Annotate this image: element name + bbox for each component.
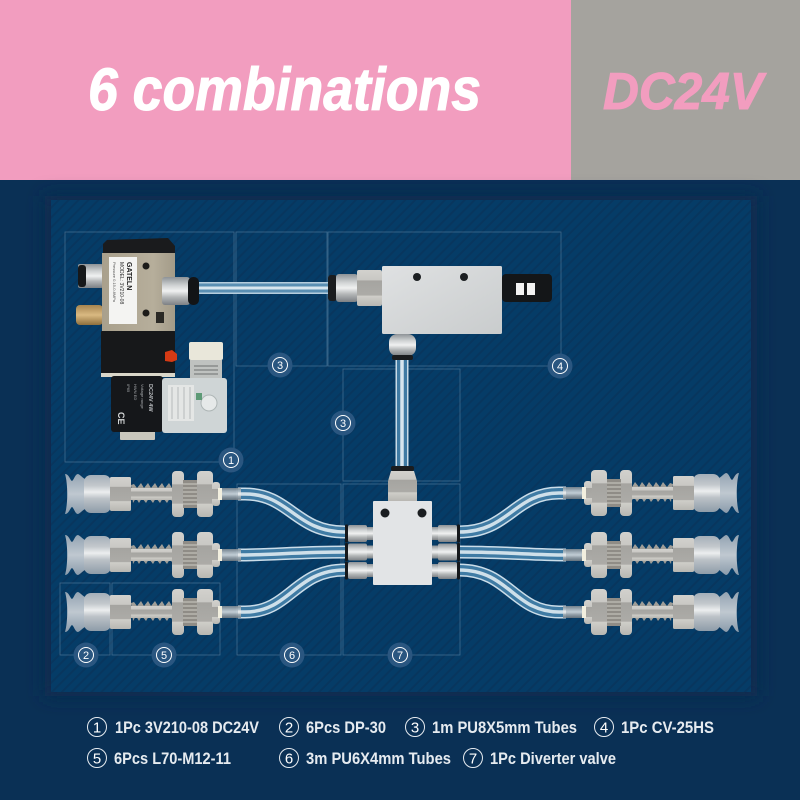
legend item 2: 2 xyxy=(285,720,293,736)
legend xyxy=(88,718,714,768)
badge 5 xyxy=(152,642,176,668)
legend item 5: 5 xyxy=(93,750,101,768)
badge 3 top xyxy=(268,352,292,378)
solenoid valve 3V210-08: Voltage range xyxy=(140,384,145,409)
badge 6 xyxy=(280,642,304,668)
solenoid valve 3V210-08 xyxy=(76,238,227,440)
badge 2: 2 xyxy=(83,650,89,662)
solenoid valve 3V210-08: CE xyxy=(116,412,126,425)
legend item 4 xyxy=(594,718,714,737)
legend item 2 xyxy=(280,718,386,737)
badge 3 top: 3 xyxy=(277,360,283,372)
suction cup assembly: left top xyxy=(65,471,241,517)
solenoid valve 3V210-08: DC24V 4W xyxy=(147,384,153,412)
legend item 4: 1Pc CV-25HS xyxy=(621,718,714,737)
tubes: right branches xyxy=(459,493,566,612)
solenoid valve 3V210-08: Pressure 0.15-0.8MPa xyxy=(112,262,117,303)
diverter valve xyxy=(345,466,460,585)
legend item 3: 1m PU8X5mm Tubes xyxy=(432,718,577,737)
horizontal tube: valve to vacuum generator xyxy=(198,282,332,294)
badge 6: 6 xyxy=(289,650,295,662)
legend item 1: 1Pc 3V210-08 DC24V xyxy=(115,718,260,737)
solenoid valve 3V210-08: IP65 xyxy=(126,384,131,393)
badge 3 lower xyxy=(330,410,356,436)
badge 1 xyxy=(218,448,244,472)
suction cup assembly: right middle xyxy=(563,532,739,578)
suction cup assembly: left bottom xyxy=(65,589,241,635)
badge 4: 4 xyxy=(557,361,563,373)
tubes: left branches xyxy=(238,494,345,612)
vacuum generator CV-25HS xyxy=(328,266,552,360)
solenoid valve 3V210-08: MODEL: 3V210-08 xyxy=(118,262,124,304)
legend item 3: 3 xyxy=(411,720,419,736)
panel: product diagram background xyxy=(51,200,751,692)
legend item 7: 7 xyxy=(469,750,477,768)
badge 4 xyxy=(548,354,572,378)
suction cup assembly: right bottom xyxy=(563,589,739,635)
label frames xyxy=(60,232,561,655)
legend item 4: 4 xyxy=(600,720,608,736)
badge 5: 5 xyxy=(161,650,167,662)
legend item 7: 1Pc Diverter valve xyxy=(490,749,616,768)
badge 3 lower: 3 xyxy=(340,418,346,430)
badge 7: 7 xyxy=(397,650,403,662)
suction cup assembly: right top xyxy=(563,470,739,516)
legend item 1: 1 xyxy=(93,720,101,736)
header: pink title band xyxy=(0,0,571,180)
badge 1: 1 xyxy=(228,455,234,467)
legend item 6: 6 xyxy=(285,750,293,768)
legend item 5: 6Pcs L70-M12-11 xyxy=(114,749,231,768)
panel shadow xyxy=(45,196,757,696)
suction cup assembly: left middle xyxy=(65,532,241,578)
vertical tube: vacuum generator to diverter xyxy=(396,355,408,472)
solenoid valve 3V210-08: GATELN xyxy=(125,262,132,290)
badge 7 xyxy=(388,642,412,668)
badge 2 xyxy=(74,642,98,668)
legend item 6: 3m PU6X4mm Tubes xyxy=(306,749,451,768)
title: 6 combinations xyxy=(88,56,481,123)
voltage label: DC24V xyxy=(603,63,767,121)
header: grey voltage band xyxy=(571,0,800,180)
solenoid valve 3V210-08: HWN ED xyxy=(133,384,138,400)
legend item 2: 6Pcs DP-30 xyxy=(306,718,386,737)
